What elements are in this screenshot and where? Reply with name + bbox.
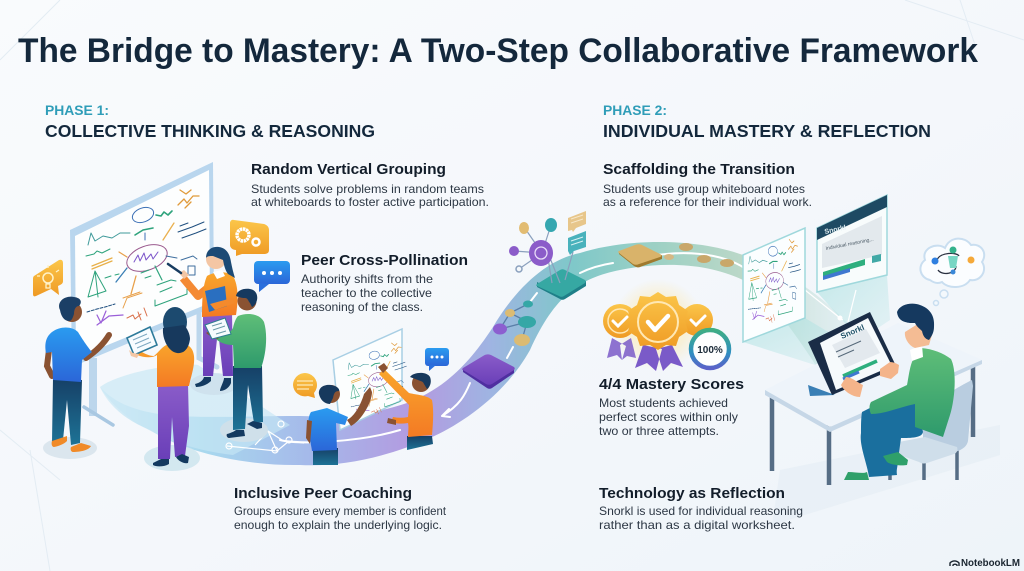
notebooklm logo: NotebookLM bbox=[961, 557, 1020, 569]
person: orange shirt peer coach bbox=[378, 363, 433, 450]
text: inclusive peer coaching: Inclusive Peer Coaching bbox=[234, 485, 412, 502]
text: scaffolding the transition: as a reference for their individual work. bbox=[603, 195, 812, 209]
phase 2 heading: PHASE 2: bbox=[603, 103, 667, 118]
text: 4/4 mastery scores: Most students achieved bbox=[599, 396, 728, 410]
shadow under first group bbox=[100, 364, 290, 455]
text: peer cross-pollination: Authority shifts from the bbox=[301, 272, 433, 286]
text: technology as reflection: rather than as a digital worksheet. bbox=[599, 518, 795, 532]
floating whiteboard bbox=[743, 226, 805, 342]
text: random vertical grouping: Random Vertical Grouping bbox=[251, 161, 446, 178]
projection beams bbox=[743, 275, 890, 365]
bubble: yellow note bbox=[293, 373, 317, 398]
flowing ribbon path bbox=[100, 242, 862, 465]
text: 4/4 mastery scores: two or three attempts. bbox=[599, 424, 719, 438]
platform: purple bbox=[462, 354, 515, 389]
desk bbox=[765, 323, 1000, 525]
text: technology as reflection: Snorkl is used for individual reasoning bbox=[599, 504, 803, 518]
text: 4/4 mastery scores: perfect scores within only bbox=[599, 410, 738, 424]
100% badge: 100% bbox=[697, 345, 723, 356]
tablet bbox=[808, 312, 897, 396]
network cluster with hub bbox=[509, 211, 586, 283]
icon: gears bubble bbox=[230, 220, 269, 256]
mini whiteboard bbox=[333, 329, 411, 430]
medals bbox=[603, 279, 713, 371]
person: student at desk bbox=[841, 304, 955, 480]
bubble: small blue chat bbox=[425, 348, 449, 371]
person: blue shirt peer coach bbox=[306, 385, 372, 465]
text: inclusive peer coaching: Groups ensure every member is confident bbox=[234, 504, 447, 518]
phase 2 heading bbox=[603, 103, 931, 141]
text: peer cross-pollination bbox=[301, 252, 468, 314]
phase 1 heading: PHASE 1: bbox=[45, 103, 109, 118]
icon: blue chat bubble bbox=[254, 261, 290, 292]
text: peer cross-pollination: teacher to the collective bbox=[301, 286, 432, 300]
phase 1 heading: COLLECTIVE THINKING & REASONING bbox=[45, 121, 375, 141]
text: random vertical grouping: Students solve problems in random teams bbox=[251, 182, 484, 196]
icon: lightbulb bubble bbox=[33, 260, 63, 296]
person: teacher with pen bbox=[168, 247, 238, 395]
chair bbox=[882, 380, 973, 480]
phase 2 heading: INDIVIDUAL MASTERY & REFLECTION bbox=[603, 121, 931, 141]
text: 4/4 mastery scores: 4/4 Mastery Scores bbox=[599, 376, 744, 393]
text: random vertical grouping bbox=[251, 161, 489, 209]
tablet: Snorkl bbox=[839, 323, 866, 341]
text: technology as reflection: Technology as Reflection bbox=[599, 485, 785, 502]
whiteboard bbox=[70, 162, 217, 425]
text: random vertical grouping: at whiteboards to foster active participation. bbox=[251, 195, 489, 209]
text: 4/4 mastery scores bbox=[599, 376, 744, 438]
text: inclusive peer coaching: enough to explain the underlying logic. bbox=[234, 518, 442, 532]
floating snorkl card: Individual reasoning... bbox=[825, 237, 874, 252]
text: technology as reflection bbox=[599, 485, 803, 532]
phase 1 heading bbox=[45, 103, 375, 141]
text: peer cross-pollination: reasoning of the class. bbox=[301, 300, 423, 314]
thought cloud bbox=[920, 239, 984, 306]
text: scaffolding the transition: Students use group whiteboard notes bbox=[603, 182, 805, 196]
platform: gold with path discs bbox=[618, 243, 734, 267]
100% badge bbox=[691, 330, 729, 368]
text: scaffolding the transition: Scaffolding the Transition bbox=[603, 161, 795, 178]
network line decoration on ribbon bbox=[226, 421, 304, 453]
floating snorkl card: Snorkl bbox=[824, 225, 847, 236]
node cluster bbox=[493, 300, 536, 346]
person: blue shirt student bbox=[43, 297, 109, 459]
text: peer cross-pollination: Peer Cross-Pollination bbox=[301, 252, 468, 269]
person: orange shirt student with tablet bbox=[127, 307, 200, 471]
person: green shirt student bbox=[205, 289, 268, 442]
text: scaffolding the transition bbox=[603, 161, 812, 209]
platform: teal bbox=[536, 269, 586, 300]
floating snorkl card bbox=[817, 195, 887, 292]
text: inclusive peer coaching bbox=[234, 485, 447, 532]
title: The Bridge to Mastery: A Two-Step Collaborative Framework bbox=[18, 32, 978, 70]
